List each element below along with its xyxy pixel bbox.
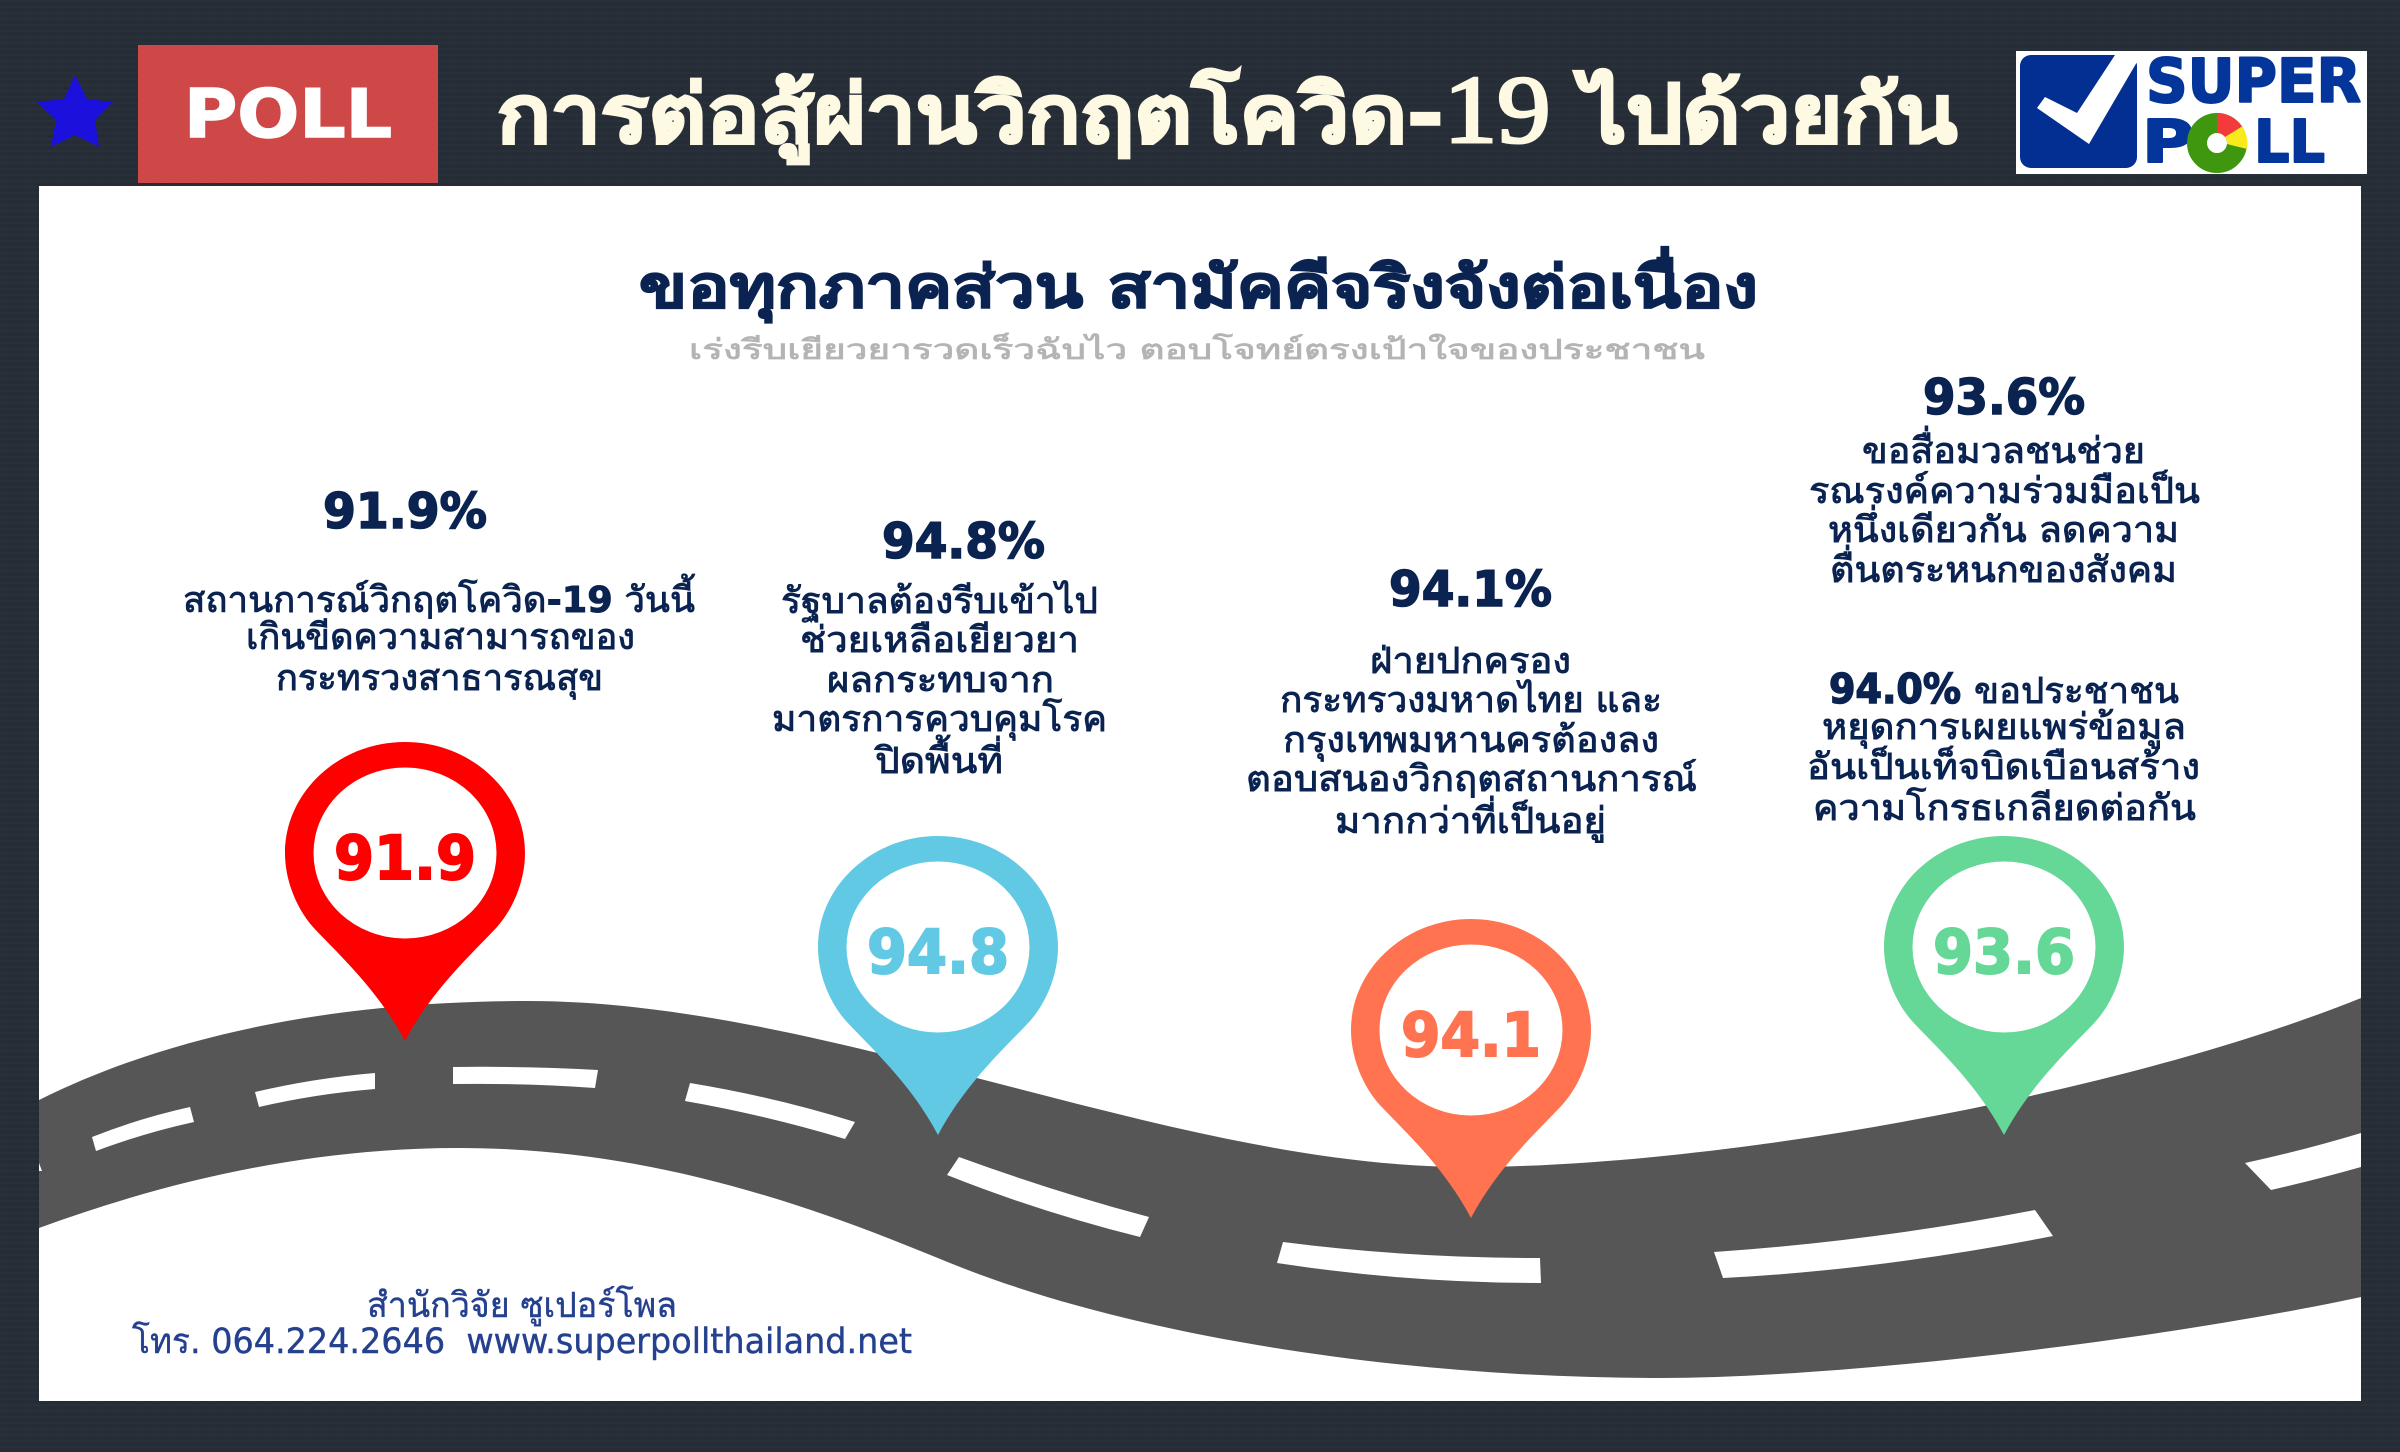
title: การต่อสู้ผ่านวิกฤตโควิด- 19 ไปด้วยกัน	[497, 56, 1957, 165]
block: 94.1%	[1246, 561, 1697, 843]
footer: contact: สำนักวิจัย ซูเปอร์โพล	[367, 1285, 677, 1326]
description 94.8: ปิดพื้นที่	[874, 734, 1003, 782]
badge: POLL: POLL	[184, 75, 392, 153]
description 94.8: มาตรการควบคุมโรค	[772, 698, 1107, 741]
description 91.9: กระทรวงสาธารณสุข	[276, 658, 603, 700]
road lane markings	[39, 1067, 2361, 1283]
description 94.0: ความโกรธเกลียดต่อกัน	[1813, 787, 2196, 829]
logo: Super Poll	[2016, 46, 2367, 176]
description 94.1: กระทรวงมหาดไทย และ	[1280, 679, 1662, 721]
description 94.8: ช่วยเหลือเยียวยา	[800, 620, 1079, 661]
logo: Super Poll: LL	[2254, 107, 2325, 176]
road	[39, 998, 2361, 1378]
description 91.9	[183, 573, 696, 700]
description 94.0: หยุดการเผยแพร่ข้อมูล	[1822, 707, 2186, 749]
pin: 93.6 green: 93.6	[1933, 917, 2075, 988]
description 94.0: ขอประชาชน	[1974, 671, 2179, 712]
description 91.9: เกินขีดความสามารถของ	[246, 617, 635, 658]
subheading: เร่งรีบเยียวยารวดเร็วฉับไว ตอบโจทย์ตรงเป้าใจของประชาชน	[689, 332, 1705, 366]
description 94.8: รัฐบาลต้องรีบเข้าไป	[781, 580, 1098, 623]
description 94.1: ตอบสนองวิกฤตสถานการณ์	[1246, 759, 1697, 800]
pin: 93.6 green	[1884, 836, 2124, 1135]
description 94.8	[772, 580, 1107, 782]
description 94.1	[1246, 641, 1697, 843]
percent 94.1: 94.1%	[1389, 561, 1552, 618]
block: 94.8%	[772, 513, 1107, 782]
percent 94.0: 94.0%	[1829, 665, 1961, 713]
percent 93.6: 93.6%	[1923, 369, 2085, 426]
logo: Super Poll: P	[2142, 109, 2194, 176]
description 94.1: มากกว่าที่เป็นอยู่	[1335, 796, 1606, 843]
block: 91.9%	[183, 483, 696, 700]
description 93.6: ขอสื่อมวลชนช่วย	[1862, 426, 2145, 472]
percent 91.9: 91.9%	[323, 483, 487, 540]
description 94.0: อันเป็นเท็จบิดเบือนสร้าง	[1807, 744, 2200, 788]
pin: 94.8 blue: 94.8	[867, 917, 1009, 988]
footer: contact: โทร. 064.224.2646 www.superpollthailand.net	[132, 1321, 912, 1362]
block: 93.6%	[1809, 369, 2200, 591]
description 94.1: ฝ่ายปกครอง	[1370, 641, 1571, 682]
description 93.6: ตื่นตระหนกของสังคม	[1830, 545, 2177, 591]
description 93.6: รณรงค์ความร่วมมือเป็น	[1809, 468, 2200, 512]
description 94.0	[1807, 671, 2200, 829]
pin: 94.1 orange: 94.1	[1401, 1000, 1541, 1071]
description 94.1: กรุงเทพมหานครต้องลง	[1283, 720, 1659, 762]
block: 94.0%	[1807, 665, 2200, 829]
pin: 91.9 red	[285, 742, 525, 1041]
badge: POLL	[138, 45, 438, 183]
percent 94.8: 94.8%	[882, 513, 1045, 570]
pin: 94.1 orange	[1351, 919, 1591, 1218]
description 93.6	[1809, 426, 2200, 591]
heading: ขอทุกภาคส่วน สามัคคีจริงจังต่อเนื่อง	[639, 246, 1758, 324]
description 93.6: หนึ่งเดียวกัน ลดความ	[1828, 505, 2179, 551]
pin: 94.8 blue	[818, 836, 1058, 1135]
logo: Super Poll: SUPER	[2146, 46, 2361, 117]
description 91.9: สถานการณ์วิกฤตโควิด-19 วันนี้	[183, 573, 696, 621]
pin: 91.9 red: 91.9	[334, 823, 476, 894]
footer: contact	[132, 1285, 912, 1362]
description 94.8: ผลกระทบจาก	[827, 660, 1054, 701]
icon: blue star	[37, 75, 113, 147]
